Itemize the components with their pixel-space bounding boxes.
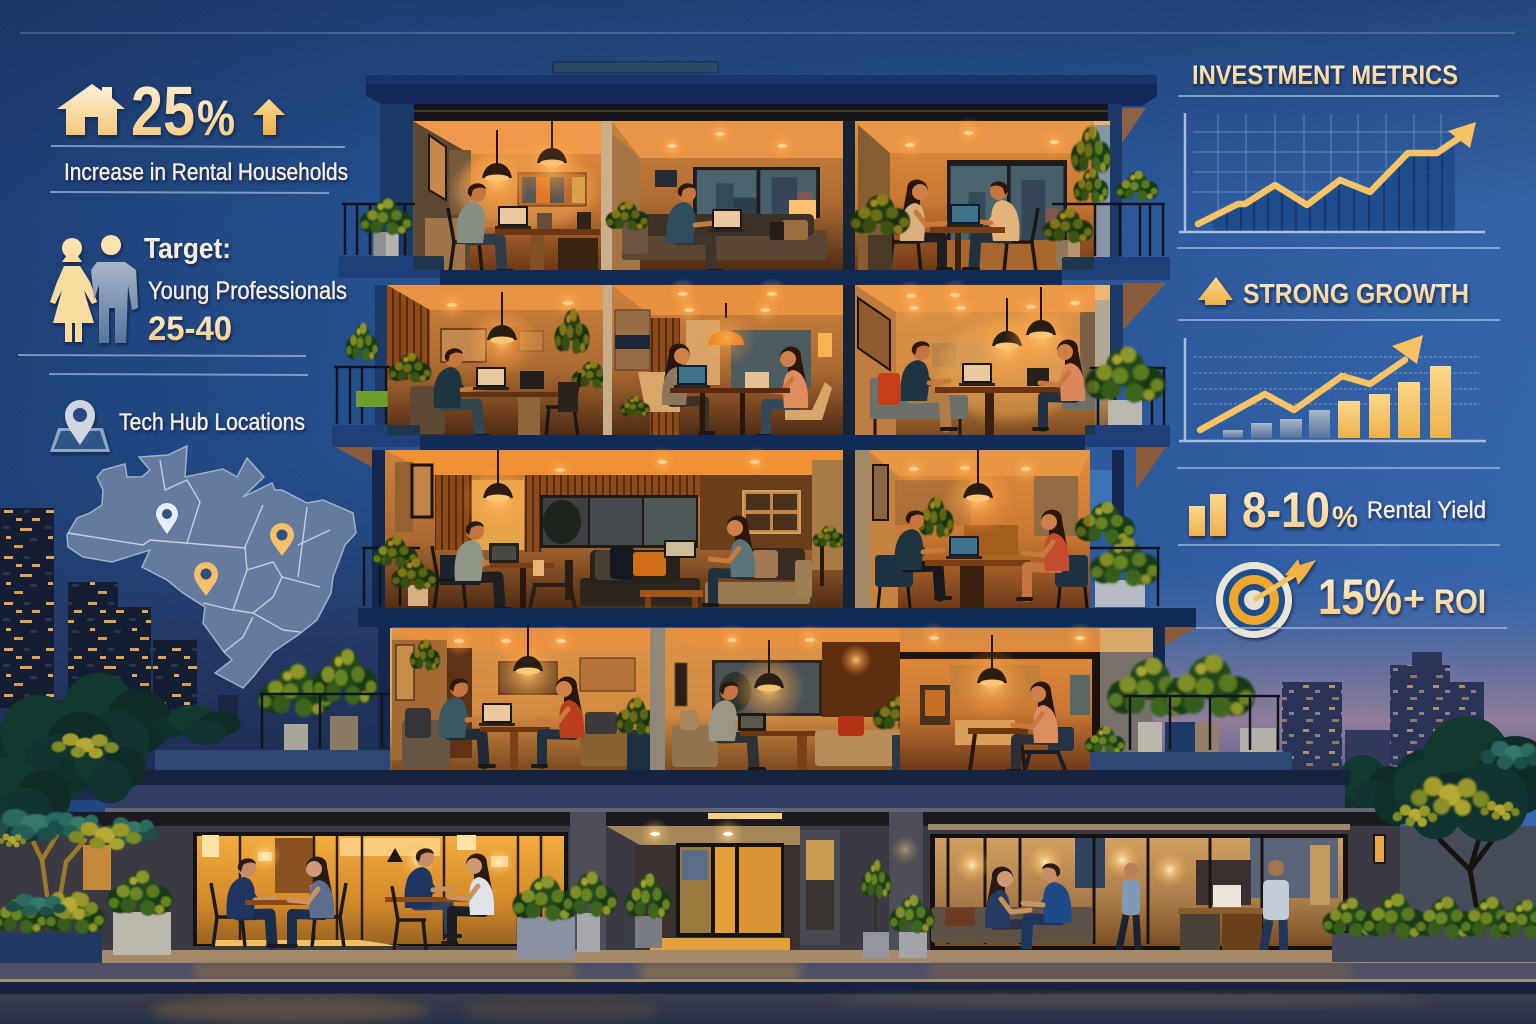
heading: strong growth: STRONG GROWTH [1243, 278, 1469, 309]
pin: white [156, 503, 178, 534]
stat: 25 percent increase [57, 72, 285, 150]
text: tech hub locations: Tech Hub Locations [119, 409, 305, 436]
room 3C: pair at table [855, 450, 1090, 608]
text: ROI: ROI [1434, 583, 1486, 621]
planters [0, 860, 1536, 963]
room 1A: man at desk [413, 115, 601, 272]
icon: house [57, 84, 125, 135]
column 1 [843, 121, 855, 270]
stat: rental yield: 8-10 [1242, 482, 1330, 538]
floor 2 [332, 278, 1170, 450]
room 4A: couple on sofa [390, 623, 656, 770]
room 1B: man on sofa [606, 118, 843, 271]
icon: up arrow [253, 99, 285, 135]
floor 2 slab [420, 435, 1085, 450]
left balcony floor 1 [338, 198, 444, 278]
text: increase in rental households: Increase in Rental Households [64, 159, 348, 186]
icon: target with arrow [1216, 559, 1316, 638]
left terrace [155, 649, 390, 772]
text: young professionals: Young Professionals [148, 277, 347, 305]
room 2B: two women at table [612, 278, 843, 436]
right skyline [1282, 652, 1484, 772]
right terrace [1085, 654, 1292, 772]
pin: gold east [270, 523, 294, 556]
right balcony floor 3 [1075, 502, 1160, 607]
warm interior light tint third floor [385, 450, 1090, 608]
curb [0, 982, 1536, 994]
structural frame [335, 104, 1196, 772]
standing man one [1119, 863, 1140, 950]
road with reflections [0, 992, 1536, 1024]
panel: market demand [18, 72, 356, 688]
column 3 [843, 450, 855, 608]
room 2A: man with laptops [387, 285, 612, 437]
icon: young professionals [50, 235, 138, 343]
dusk sky right [1150, 560, 1536, 790]
right tree [1374, 716, 1536, 905]
roof [366, 62, 1157, 122]
left tree [0, 695, 158, 920]
left balcony floor 2 [332, 323, 420, 447]
icon: yield bars [1189, 494, 1226, 536]
right wall section floor 4 [1100, 652, 1153, 770]
line chart with area bars [1179, 113, 1485, 232]
text: age 25-40: 25-40 [148, 310, 232, 348]
divider 1 [601, 121, 612, 270]
text: target: Target: [144, 233, 231, 265]
column 2 [843, 285, 855, 435]
room 2C: man and woman on laptops [855, 279, 1110, 435]
room 1C: two at table [850, 117, 1111, 272]
right neighbour wall [1400, 826, 1536, 936]
warm interior light tint fourth floor [392, 628, 1100, 770]
map of Brazil [67, 446, 356, 688]
column 4 [650, 628, 665, 770]
floor 3 slab [358, 608, 1196, 627]
cafe storefront [193, 832, 568, 950]
percent sign: % [197, 90, 235, 146]
icon: location pin on map [50, 400, 110, 452]
lobby entrance [570, 812, 923, 952]
text: rental yield: Rental Yield [1367, 497, 1486, 524]
warm interior light tint [414, 121, 1094, 270]
pin: gold south [194, 562, 218, 596]
room 3A: living room with sofa [385, 446, 845, 610]
floor 4 [155, 121, 1292, 772]
lounge storefront [928, 824, 1350, 956]
heading: investment metrics: INVESTMENT METRICS [1192, 60, 1458, 90]
bar chart with trend [1179, 335, 1486, 441]
divider 2 [603, 285, 612, 435]
warm interior light tint lower [387, 285, 1095, 435]
icon: growth arrow [1198, 277, 1233, 305]
right balcony floor 1 [1043, 171, 1170, 280]
top hairline [20, 32, 1515, 34]
left balcony floor 3 [362, 536, 436, 606]
dusk shade left [0, 450, 380, 800]
percent sign: % [1332, 501, 1358, 534]
background trees behind podium [38, 673, 1411, 824]
panel: investment metrics [1177, 60, 1507, 638]
floor 1 [338, 115, 1170, 285]
left wall window [83, 845, 111, 890]
ground floor [0, 812, 1536, 958]
floor 1 slab [440, 270, 1062, 285]
ground wall [0, 826, 1400, 952]
podium band [60, 770, 1405, 826]
standing man two [1262, 860, 1289, 958]
plus sign: + [1403, 580, 1425, 618]
25 percent: 25 [131, 72, 195, 150]
wall sconce [1374, 835, 1385, 863]
room 4B: man with laptop and wood wall [665, 624, 923, 770]
pavement [0, 950, 1536, 982]
left skyline [0, 508, 238, 725]
room 4C: open kitchen [900, 622, 1153, 771]
stat: ROI percent: 15% [1318, 569, 1402, 625]
floor 3 [358, 446, 1196, 627]
right balcony floor 2 [1085, 347, 1170, 447]
